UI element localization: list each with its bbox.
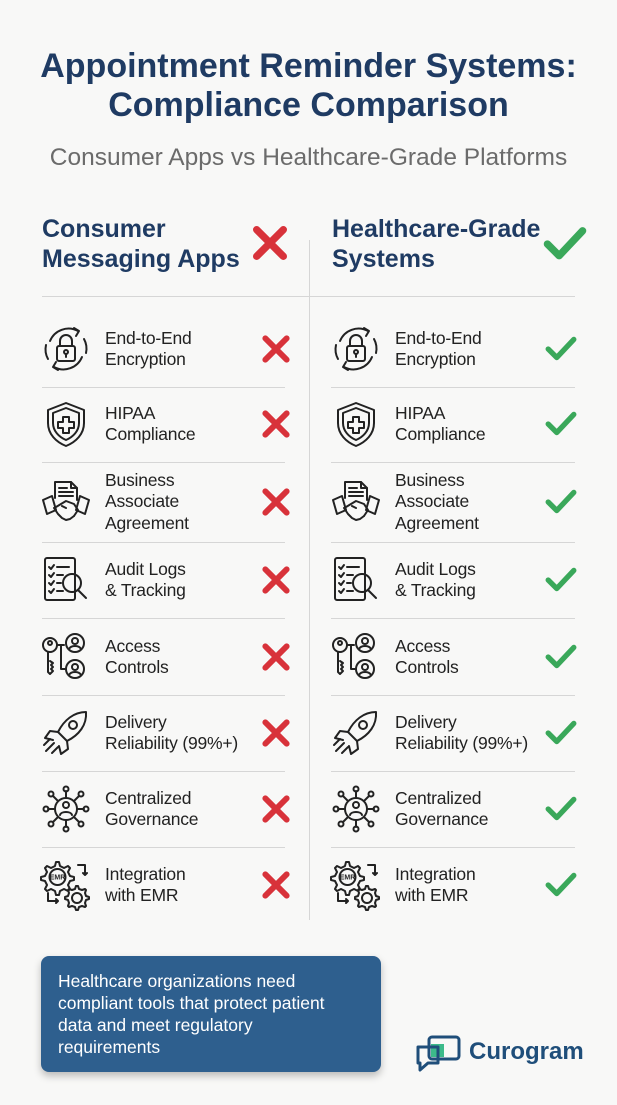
row: governance: Centralized — [105, 788, 191, 808]
row: audit: & Tracking — [395, 580, 476, 600]
icon: green check header — [544, 227, 586, 260]
row: encryption: End-to-End — [105, 328, 192, 348]
row: governance: Governance — [105, 809, 198, 829]
row: audit: Audit Logs — [395, 558, 476, 578]
column header: consumer: Messaging Apps — [42, 245, 240, 273]
row: delivery: Reliability (99%+) — [395, 733, 528, 753]
row: baa: Business — [105, 470, 174, 490]
row: hipaa: Compliance — [395, 424, 485, 444]
row: encryption — [334, 327, 576, 371]
row: emr: with EMR — [395, 885, 468, 905]
logo: Curogram — [416, 1036, 584, 1072]
row: access: Controls — [395, 657, 459, 677]
callout: footer message: Healthcare organizations need — [58, 971, 295, 991]
title: Compliance Comparison — [108, 86, 509, 124]
column header: healthcare — [332, 215, 540, 273]
row: hipaa: HIPAA — [105, 402, 155, 422]
row: encryption: End-to-End — [395, 328, 482, 348]
callout: footer message: compliant tools that protect patient — [58, 993, 325, 1013]
row: audit: Audit Logs — [105, 558, 186, 578]
row: baa: Agreement — [395, 513, 479, 533]
row: delivery — [43, 711, 290, 755]
row: hipaa: Compliance — [105, 424, 195, 444]
row: baa: Business — [395, 470, 464, 490]
title: Appointment Reminder Systems: — [40, 47, 577, 85]
column header: consumer: Consumer — [42, 215, 166, 243]
row: governance: Governance — [395, 809, 488, 829]
row: hipaa: HIPAA — [395, 402, 445, 422]
row: access: Access — [395, 636, 450, 656]
column header: healthcare: Systems — [332, 245, 435, 273]
row: baa — [332, 470, 576, 533]
column header: healthcare: Healthcare-Grade — [332, 215, 540, 243]
row: emr: with EMR — [105, 885, 178, 905]
row: emr: Integration — [105, 864, 186, 884]
title — [40, 47, 577, 124]
logo text: Curogram — [469, 1038, 584, 1065]
row: emr — [330, 861, 576, 911]
row: access: Access — [105, 636, 160, 656]
row: access — [42, 633, 290, 679]
column header: consumer — [42, 215, 240, 273]
row: emr — [40, 861, 290, 911]
row: baa — [42, 470, 290, 533]
row: access: Controls — [105, 657, 169, 677]
callout: footer message: data and meet regulatory — [58, 1015, 253, 1035]
row: audit — [334, 557, 576, 601]
row: baa: Associate — [395, 491, 469, 511]
row: audit — [44, 557, 290, 601]
row: hipaa — [337, 402, 576, 447]
row: encryption: Encryption — [395, 349, 476, 369]
row: encryption: Encryption — [105, 349, 186, 369]
icon: red x header — [253, 226, 287, 260]
panel: consumer apps — [40, 327, 290, 911]
row: governance — [332, 786, 576, 832]
icon: chat bubbles — [416, 1036, 460, 1072]
row: audit: & Tracking — [105, 580, 186, 600]
row: baa: Agreement — [105, 513, 189, 533]
row: governance — [42, 786, 290, 832]
callout: footer message: requirements — [58, 1037, 160, 1057]
callout: footer message — [41, 956, 381, 1072]
row: delivery: Delivery — [395, 712, 457, 732]
row: delivery: Delivery — [105, 712, 167, 732]
row: governance: Centralized — [395, 788, 481, 808]
panel: healthcare systems — [330, 327, 576, 911]
row: baa: Associate — [105, 491, 179, 511]
row: hipaa — [47, 402, 290, 447]
row: delivery: Reliability (99%+) — [105, 733, 238, 753]
row: encryption — [44, 327, 290, 371]
row: emr: Integration — [395, 864, 476, 884]
row: access — [332, 633, 576, 679]
subtitle: Consumer Apps vs Healthcare-Grade Platforms — [50, 144, 567, 171]
row: delivery — [333, 711, 576, 755]
